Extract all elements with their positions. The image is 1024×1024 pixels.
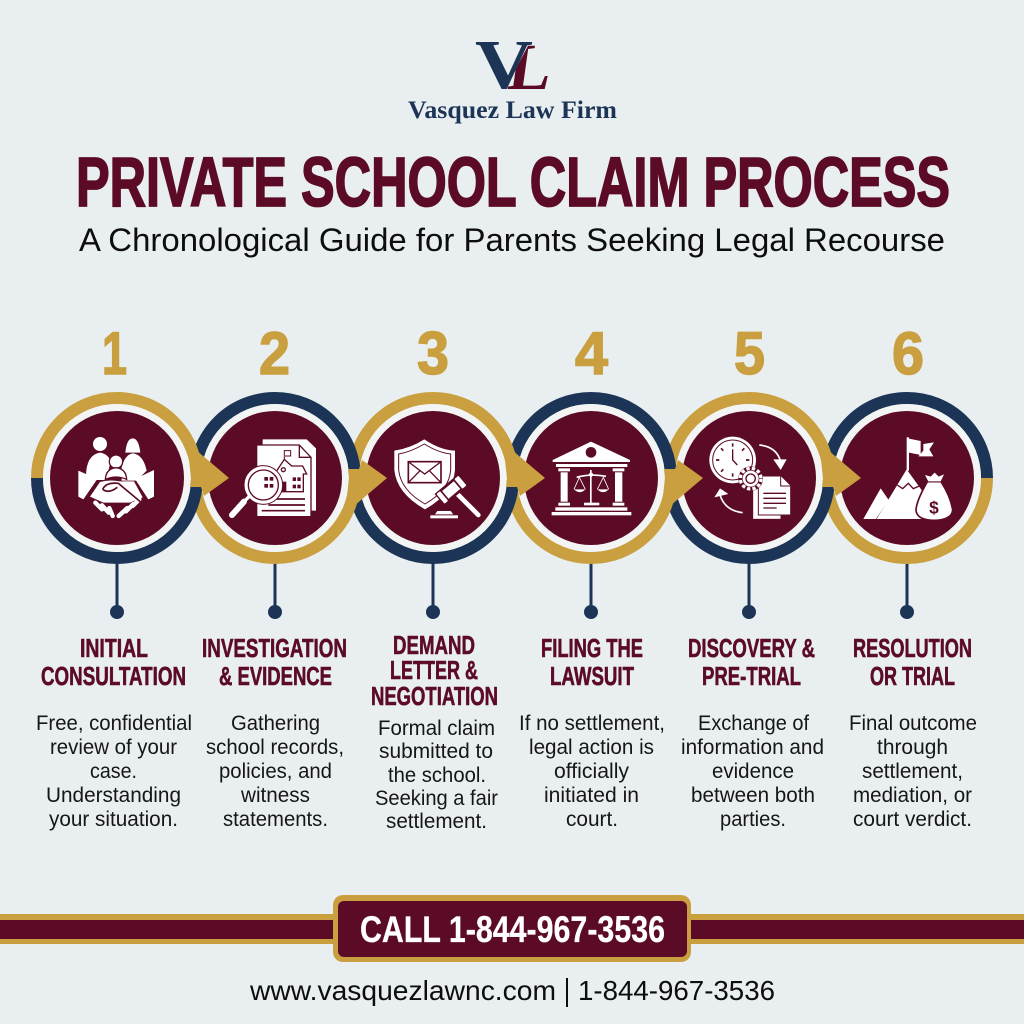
step numbers: 6 [892,320,924,387]
footer contact line: www.vasquezlawnc.com [249,975,556,1006]
step 5 heading: DISCOVERY & [688,635,815,663]
step 3 heading: NEGOTIATION [371,683,498,711]
footer contact line: 1-844-967-3536 [578,975,775,1006]
icon: courthouse and scales [552,442,631,515]
circle 6 [827,398,987,558]
step 3 description: submitted to [379,740,493,763]
step 6 description: Final outcome [849,712,977,735]
step 4 heading: LAWSUIT [550,663,634,691]
logo: Vasquez Law Firm [408,42,616,124]
step 6 description: mediation, or [853,784,972,807]
step 3 heading: DEMAND [393,632,475,660]
step 4 description: If no settlement, [519,712,665,735]
step numbers: 3 [417,320,449,387]
step 5 heading: PRE-TRIAL [702,663,801,691]
circle 3 [353,398,513,558]
circle 5 [669,398,829,558]
step 1 description: Free, confidential [36,712,192,735]
arrow 4 to 5 [663,460,703,506]
logo: Vasquez Law Firm: V [475,27,533,104]
step 1 heading: CONSULTATION [41,663,186,691]
step 2 description: school records, [206,736,344,759]
step 4 description [519,712,665,831]
arrow 2 to 3 [347,460,387,506]
step 3 heading [371,632,498,711]
step 1 heading [41,635,186,691]
step 6 description: through [877,736,948,759]
step 2 heading [202,635,347,691]
step 1 description: Understanding [46,784,181,807]
arrow 3 to 4 [505,450,545,496]
step 6 description: court verdict. [853,808,972,831]
step 3 heading: LETTER & [390,657,478,685]
icon: family and handshake [78,437,154,516]
step 3 description: Seeking a fair [375,787,498,810]
step 5 description: between both [691,784,815,807]
step 1 description: case. [90,760,137,783]
step 6 heading: OR TRIAL [870,663,955,691]
step 2 heading: INVESTIGATION [202,635,347,663]
step 4 heading [541,635,643,691]
step 6 heading: RESOLUTION [853,635,972,663]
step 5 description: evidence [712,760,794,783]
step numbers: 5 [734,320,765,387]
footer contact line [249,975,775,1007]
icon: clock gear and document [709,437,791,519]
step 3 description: the school. [388,764,486,787]
step 2 description [206,712,344,831]
step 1 description: review of your [50,736,177,759]
logo: Vasquez Law Firm: L [504,31,557,104]
circle 4 [511,398,671,558]
step 6 description [849,712,977,831]
call button: CALL 1-844-967-3536 [360,909,665,950]
step 5 description: Exchange of [698,712,809,735]
subtitle: A Chronological Guide for Parents Seeking Legal Recourse [79,222,945,258]
step 5 description [681,712,824,831]
step numbers: 2 [259,320,290,387]
step 2 description: statements. [223,808,328,831]
step 4 description: legal action is [529,736,654,759]
step 2 heading: & EVIDENCE [219,663,332,691]
icon: mountain flag and money bag: $ [929,497,939,517]
call button [333,895,691,962]
step 2 description: policies, and [219,760,332,783]
step 4 description: court. [566,808,618,831]
call banner band [0,914,1024,944]
step 5 heading [688,635,815,691]
step 2 description: Gathering [231,712,320,735]
step 5 description: information and [681,736,824,759]
connector stems [110,562,914,619]
step 3 description: Formal claim [378,717,495,740]
icon: mountain flag and money bag [863,437,953,520]
step 4 heading: FILING THE [541,635,643,663]
step 6 heading [853,635,972,691]
step 4 description: initiated in [544,784,639,807]
step 4 description: officially [554,760,630,783]
circle 1 [37,398,197,558]
icon: document with school and magnifier [232,439,316,517]
arrow 1 to 2 [189,450,229,496]
step numbers: 4 [575,320,609,387]
step 2 description: witness [240,784,310,807]
step 6 description: settlement, [862,760,963,783]
circle 2 [195,398,355,558]
arrow 5 to 6 [821,450,861,496]
step 3 description: settlement. [386,810,487,833]
step 1 description: your situation. [49,808,178,831]
step 1 description [36,712,192,831]
step numbers [102,320,924,387]
step 1 heading: INITIAL [80,635,148,663]
step numbers: 1 [102,320,127,387]
step 5 description: parties. [720,808,786,831]
logo: Vasquez Law Firm: Vasquez Law Firm [408,97,617,124]
step 3 description [375,717,498,833]
icon: shield envelope and gavel [394,439,478,518]
